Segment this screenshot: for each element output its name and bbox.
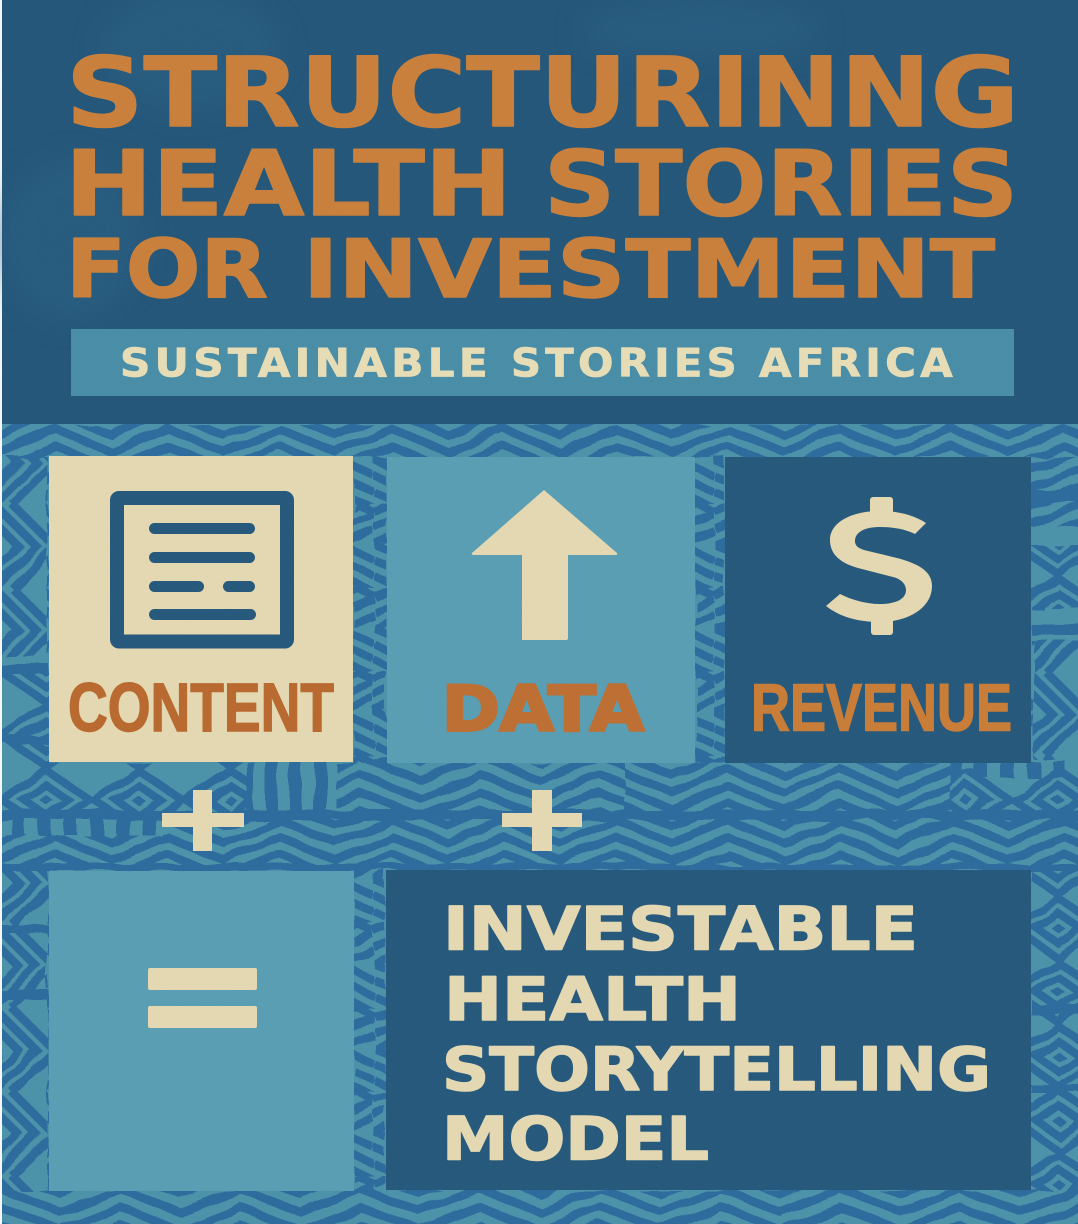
panel: data — [387, 457, 695, 763]
result text: INVESTABLE — [443, 894, 918, 964]
header panel — [0, 0, 1078, 424]
subtitle banner: AFRICA — [759, 342, 957, 386]
subtitle banner — [71, 329, 1014, 396]
result text: MODEL — [442, 1104, 709, 1174]
icon: up arrow — [472, 490, 617, 640]
title: HEALTH — [65, 132, 512, 237]
panel: result — [386, 870, 1031, 1190]
panel: revenue — [725, 457, 1031, 763]
label: content: CONTENT — [68, 669, 334, 746]
icon: plus two — [502, 790, 582, 851]
title: STORIES — [544, 132, 1018, 237]
title: STRUCTURINNG — [66, 37, 1019, 149]
icon: plus one — [162, 790, 244, 851]
result text: HEALTH — [444, 965, 741, 1035]
subtitle banner: SUSTAINABLE — [120, 342, 492, 386]
icon: dollar sign — [826, 497, 932, 635]
panel: equals — [49, 871, 354, 1191]
label: data: DATA — [442, 672, 644, 746]
result text — [442, 894, 991, 1174]
subtitle banner: STORIES — [511, 342, 741, 386]
icon: equals sign — [148, 968, 257, 1028]
title: FOR — [66, 223, 268, 316]
result text: STORYTELLING — [442, 1035, 991, 1105]
title: INVESTMENT — [303, 223, 996, 316]
icon: document — [117, 498, 287, 642]
label: revenue: REVENUE — [751, 670, 1012, 746]
title — [65, 37, 1019, 316]
tribal pattern background — [0, 424, 1078, 1224]
panel: content — [49, 456, 353, 762]
